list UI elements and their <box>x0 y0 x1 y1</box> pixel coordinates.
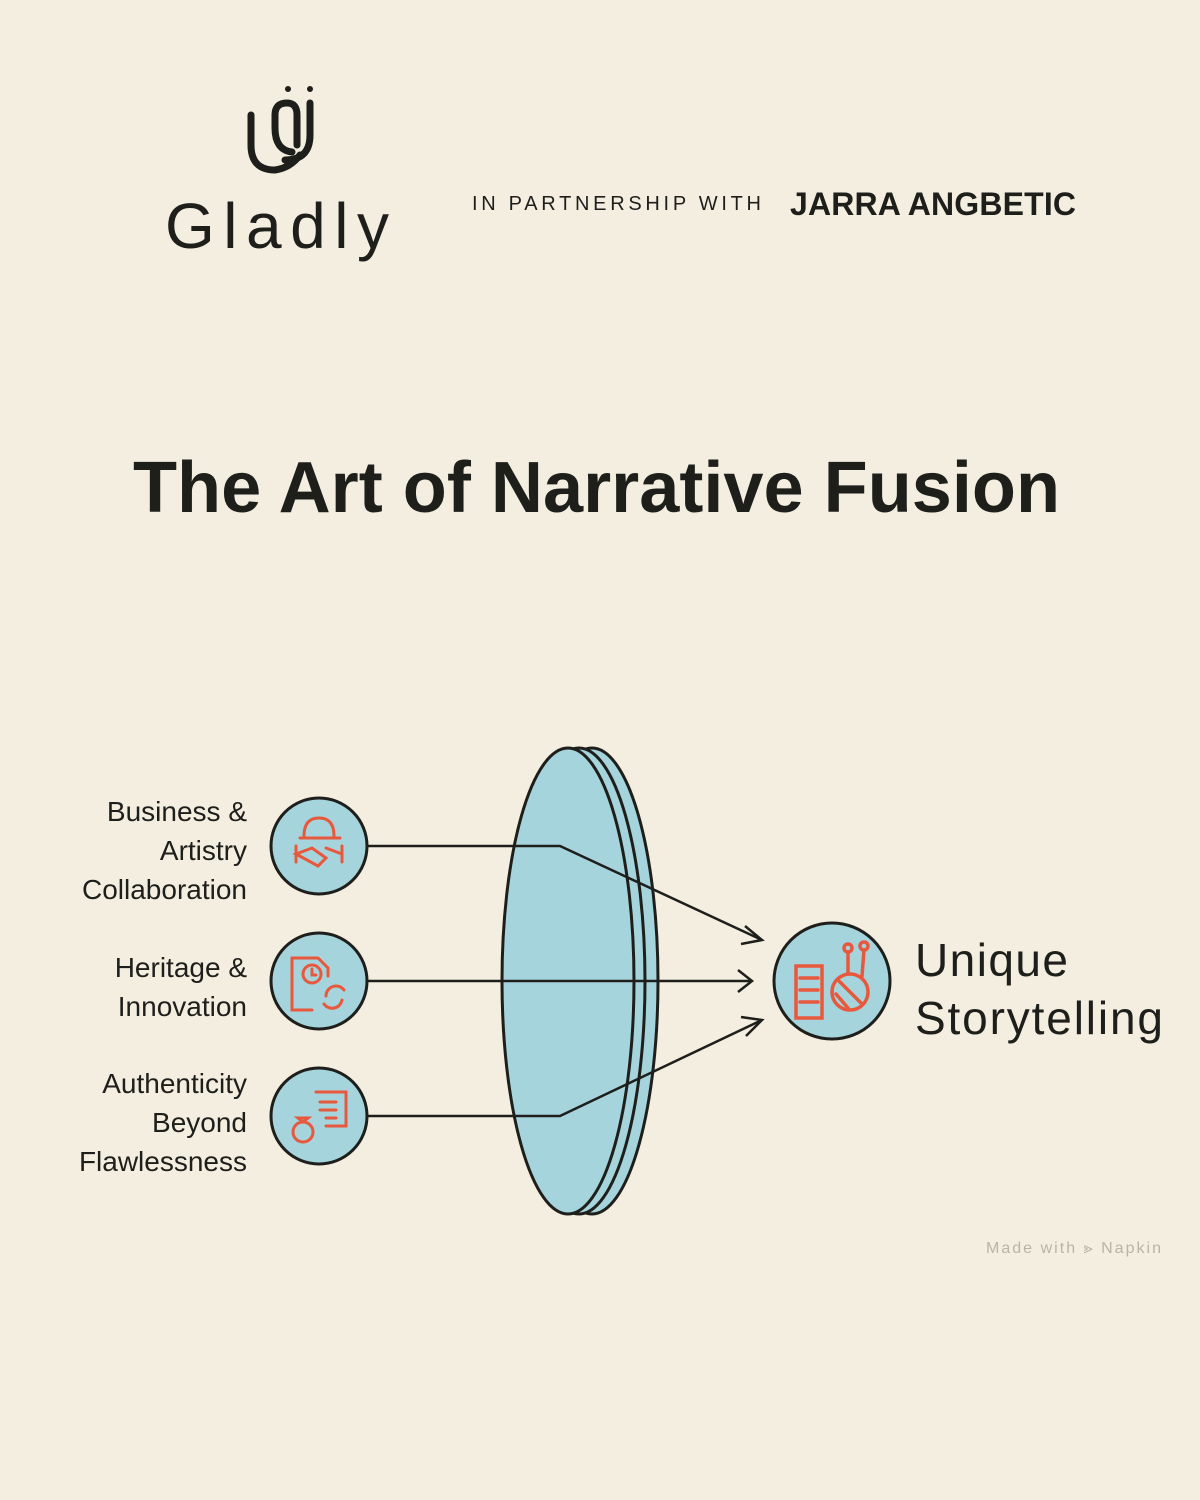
partnership line: IN PARTNERSHIP WITH <box>472 193 764 215</box>
output: unique storytelling <box>774 923 1163 1044</box>
input 2: heritage & innovation: Innovation <box>118 991 247 1022</box>
input 3: authenticity: Beyond <box>152 1107 247 1138</box>
text: Gladly: Gladly <box>165 190 395 262</box>
input 1: business & artistry: Artistry <box>160 835 247 866</box>
partnership line <box>472 186 1076 222</box>
input 3: authenticity: Flawlessness <box>79 1146 247 1177</box>
arrows <box>367 846 762 1116</box>
input 1: business & artistry <box>82 796 367 905</box>
partnership line: JARRA ANGBETIC <box>790 186 1076 222</box>
input 3: authenticity: Authenticity <box>102 1068 247 1099</box>
output: unique storytelling: Unique <box>915 934 1068 986</box>
input 1: business & artistry: Business & <box>107 796 247 827</box>
footer: made with napkin: Made with ⪢ Napkin <box>986 1240 1161 1257</box>
output: unique storytelling: Storytelling <box>915 992 1163 1044</box>
lens <box>502 748 658 1214</box>
input 2: heritage & innovation: Heritage & <box>115 952 247 983</box>
logo: Gladly <box>165 86 395 262</box>
input 2: heritage & innovation <box>115 933 367 1029</box>
input 3: authenticity <box>79 1068 367 1177</box>
icon: gladly mark <box>251 86 313 170</box>
input 1: business & artistry: Collaboration <box>82 874 247 905</box>
title: The Art of Narrative Fusion <box>133 448 1060 528</box>
